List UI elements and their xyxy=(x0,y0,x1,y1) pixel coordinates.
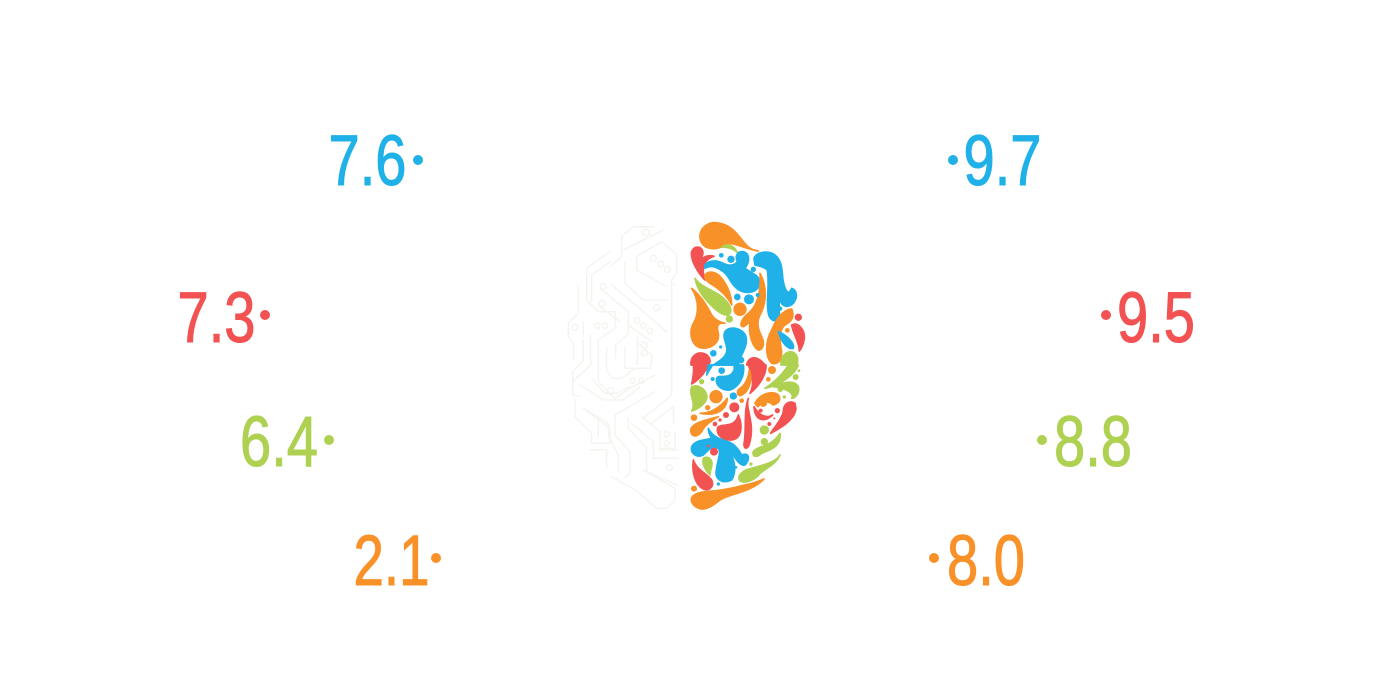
right score: blue 9.7 xyxy=(948,122,1042,201)
right score: blue 9.7: 9.7 xyxy=(964,122,1042,201)
brain right half: colourful swirls, upper part xyxy=(691,223,804,365)
brain left half: faint circuit traces xyxy=(568,227,678,508)
right score: orange 8.0 xyxy=(929,522,1025,601)
right score: green 8.8 xyxy=(1037,403,1132,482)
left score: orange 2.1: 2.1 xyxy=(354,522,430,601)
brain right half: colourful swirls, lower part xyxy=(691,365,800,509)
right score: red 9.5: 9.5 xyxy=(1117,279,1195,358)
left score: red 7.3: 7.3 xyxy=(178,279,256,358)
right score: red 9.5 xyxy=(1101,279,1195,358)
left score: blue 7.6: 7.6 xyxy=(328,122,406,201)
right score: green 8.8: 8.8 xyxy=(1054,403,1132,482)
right score: orange 8.0: 8.0 xyxy=(947,522,1025,601)
left score: green 6.4: 6.4 xyxy=(240,403,318,482)
